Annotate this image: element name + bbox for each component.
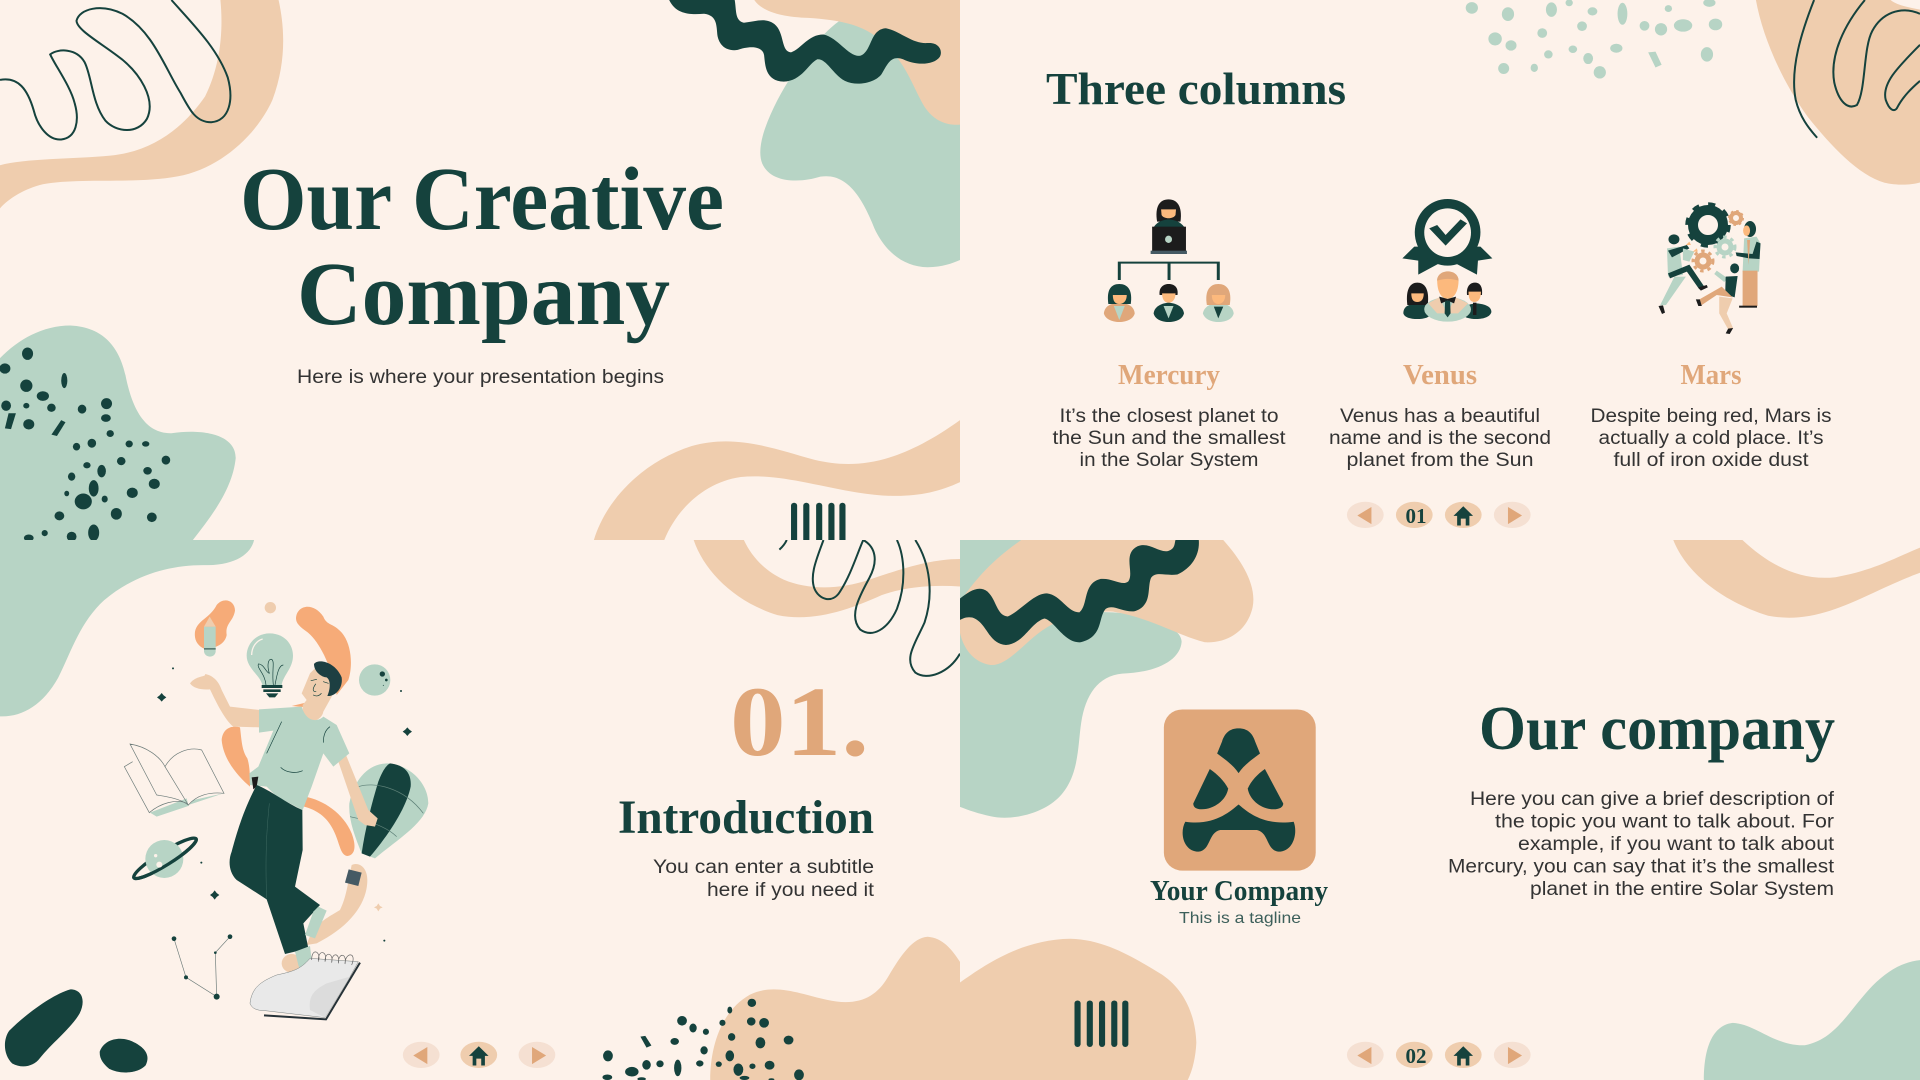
column: Mars: Despite being red, Mars is: [1590, 406, 1832, 427]
description text: Here you can give a brief description of: [1470, 789, 1835, 810]
panel: our company slide: [960, 540, 1920, 1080]
page number 02: 02: [1406, 1044, 1426, 1068]
column: Mercury: Mercury: [1118, 360, 1220, 391]
subtitle text: here if you need it: [707, 880, 875, 901]
column: Mercury: It’s the closest planet to: [1060, 406, 1278, 427]
column: Venus: planet from the Sun: [1346, 450, 1534, 471]
company name: Your Company: [1150, 876, 1328, 907]
illustration: man juggling ideas: [124, 600, 428, 1019]
introduction background shapes: [0, 540, 960, 1080]
icon: team with gears people: [1659, 221, 1761, 334]
tagline: This is a tagline: [1179, 910, 1301, 927]
decorative bars: [1074, 1000, 1128, 1047]
section number: 01.: [730, 666, 869, 777]
subtitle: Here is where your presentation begins: [297, 367, 664, 388]
man: [190, 661, 378, 978]
title slide background shapes: [0, 0, 960, 540]
icon: award team: [1402, 199, 1492, 322]
navigation buttons: [403, 1042, 555, 1068]
moon: [359, 664, 390, 696]
hot air balloon: [307, 763, 428, 945]
open book: [124, 744, 224, 817]
navigation buttons: [1347, 502, 1531, 528]
column: Venus: Venus: [1403, 360, 1477, 391]
column: Venus: Venus has a beautiful: [1340, 406, 1540, 427]
subtitle text: You can enter a subtitle: [653, 857, 874, 878]
heading: introduction: Introduction: [618, 791, 874, 844]
description text: example, if you want to talk about: [1518, 834, 1835, 855]
stars: [157, 667, 412, 942]
title: Our Creative: [240, 150, 724, 249]
description text: Mercury, you can say that it’s the smallest: [1448, 856, 1835, 878]
description text: [1448, 789, 1835, 900]
heading: three columns: Three columns: [1046, 63, 1346, 114]
column: Venus: [1329, 360, 1551, 471]
light bulb: [247, 633, 293, 697]
peach dot: [265, 602, 276, 613]
column: Mars: Mars: [1680, 360, 1742, 391]
column: Mars: full of iron oxide dust: [1614, 450, 1809, 471]
page number 01: 01: [1406, 504, 1426, 528]
title: Company: [297, 245, 670, 344]
subtitle text: [653, 857, 875, 901]
orange splashes: [195, 600, 355, 856]
column: Mars: [1590, 360, 1832, 471]
panel: title slide: [0, 0, 960, 548]
heading: our company: Our company: [1479, 695, 1835, 763]
notebook: [250, 952, 360, 1019]
title: [240, 150, 724, 344]
navigation buttons: [1347, 1042, 1531, 1068]
pencil: [204, 617, 216, 657]
icon: org chart: [1104, 199, 1760, 334]
panel: three columns slide: [1046, 0, 1920, 528]
description text: the topic you want to talk about. For: [1495, 812, 1835, 832]
saturn planet: [130, 833, 200, 883]
three columns background shapes: [1347, 0, 1920, 528]
column: Venus: name and is the second: [1329, 428, 1551, 449]
column: Mercury: [1052, 360, 1286, 471]
icon: gears: [1688, 204, 1743, 271]
constellation: [172, 934, 232, 1000]
column: Mercury: in the Solar System: [1080, 450, 1258, 471]
column: Mercury: the Sun and the smallest: [1052, 428, 1286, 449]
column: Mars: actually a cold place. It’s: [1598, 428, 1824, 449]
logo badge: [1164, 709, 1316, 871]
panel: introduction slide: [0, 540, 960, 1080]
description text: planet in the entire Solar System: [1530, 879, 1834, 900]
company background shapes: [960, 540, 1920, 1080]
